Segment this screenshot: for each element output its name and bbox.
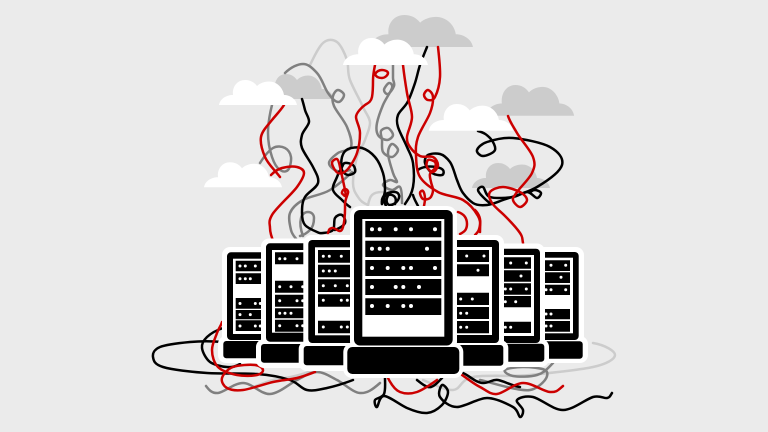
black cords: [153, 47, 612, 417]
tangled cords: [153, 40, 615, 417]
server far right: [514, 247, 588, 363]
white clouds: [204, 38, 513, 187]
server second right: [470, 244, 549, 367]
gray clouds: [262, 15, 574, 188]
light gray cords: [253, 40, 615, 390]
server second left: [256, 238, 336, 368]
server third right: [423, 235, 508, 371]
server center: [343, 206, 463, 378]
gray cords: [206, 64, 553, 394]
red cords: [212, 47, 563, 394]
server far left: [218, 247, 292, 363]
server third left: [299, 235, 385, 371]
